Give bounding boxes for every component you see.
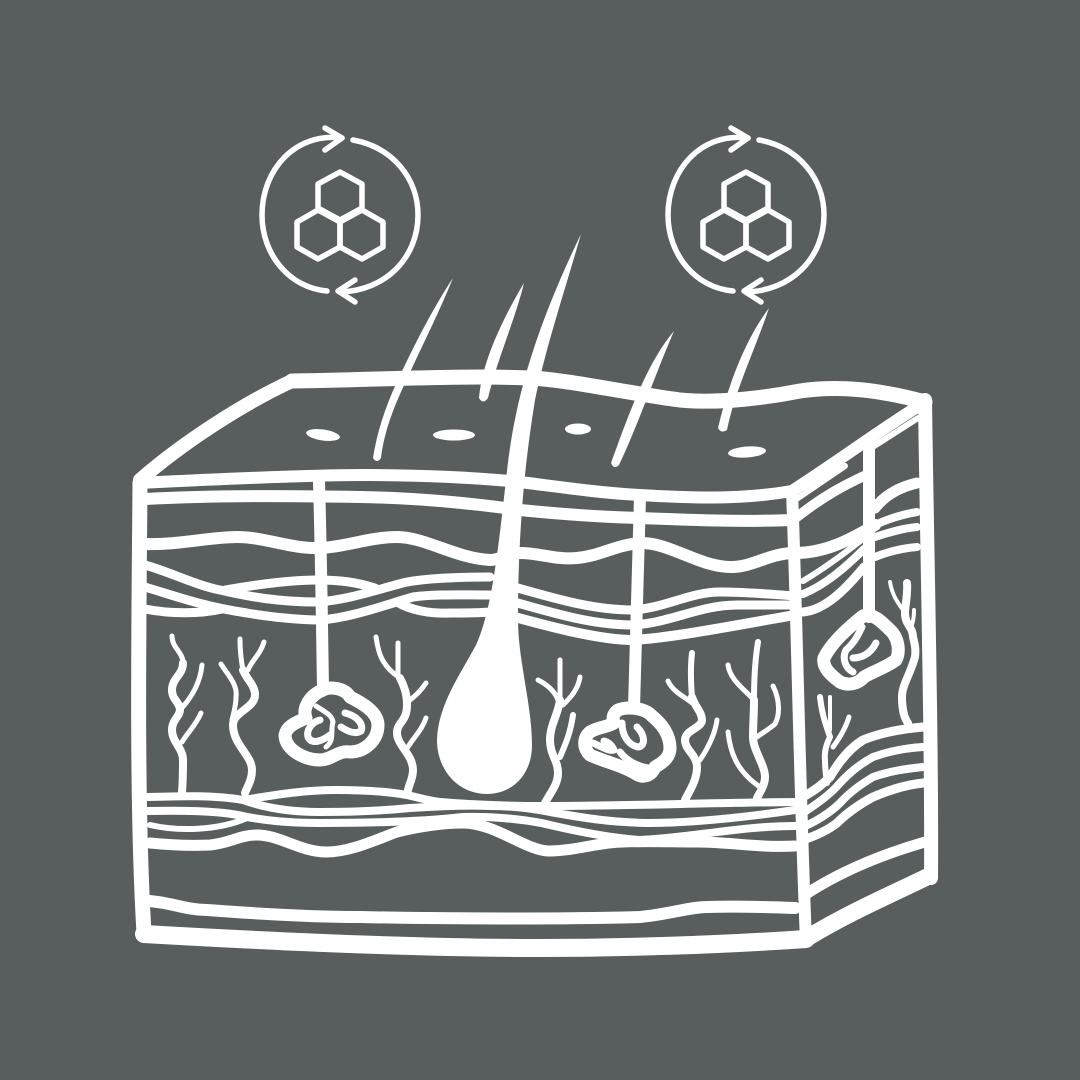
vessel 5 — [668, 653, 717, 800]
sweat gland right — [824, 615, 898, 684]
sweat gland center — [585, 708, 670, 776]
vessel 4 — [538, 660, 580, 803]
small hairs — [373, 278, 769, 467]
sweat gland left — [285, 688, 378, 760]
main hair and follicle — [437, 234, 581, 794]
side wall lower layers — [803, 727, 925, 894]
hypodermis lower layer — [148, 901, 795, 918]
blood vessels — [172, 582, 915, 803]
vessel 6 — [728, 642, 779, 798]
epidermis layers — [145, 496, 875, 640]
vessel 1 — [172, 636, 202, 792]
skin block outline — [139, 377, 931, 948]
skin surface pores — [305, 424, 766, 459]
vessel 2 — [221, 639, 264, 793]
icon: left molecule renewal cycle — [262, 128, 418, 302]
sweat duct tubes — [319, 445, 869, 708]
side vessels — [820, 582, 915, 783]
dermis lower layers — [148, 790, 795, 852]
vessel 3 — [376, 637, 426, 790]
side wall upper layers — [795, 418, 918, 612]
icon: right molecule renewal cycle — [668, 128, 824, 302]
